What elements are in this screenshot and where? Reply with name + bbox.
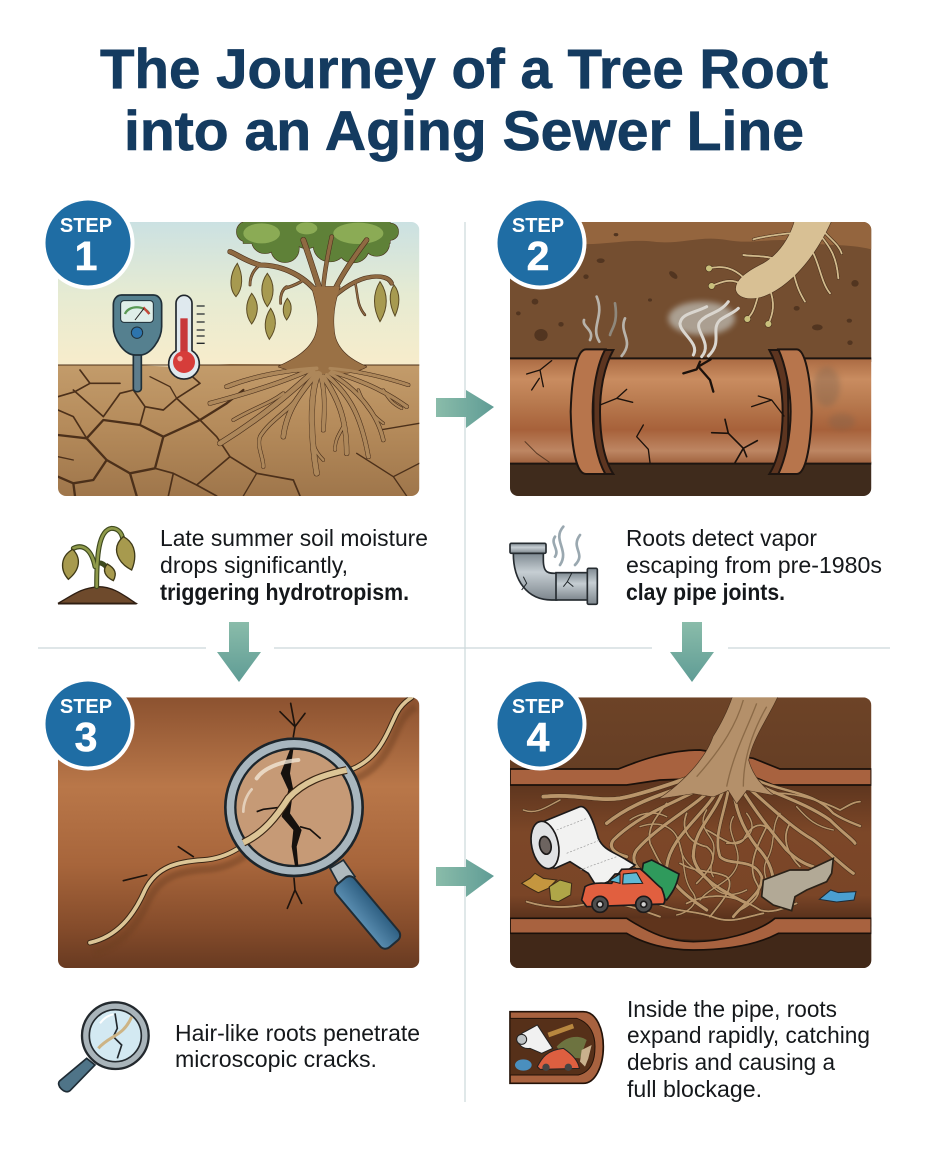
title: The Journey of a Tree Root [100, 37, 828, 100]
panel: step 4 roots blocking pipe [510, 695, 871, 970]
buried soil below pipe [510, 462, 871, 498]
badge: step 1: STEP [60, 215, 112, 237]
blue debris [819, 890, 856, 902]
vapor cloud [668, 302, 738, 357]
text: step 2 caption: escaping from pre-1980s [626, 552, 882, 578]
badge: step 1 [42, 196, 134, 290]
text: step 2 caption [626, 525, 882, 605]
pipe collars [571, 349, 812, 474]
roots [210, 368, 408, 473]
wilted leaves [231, 263, 399, 339]
text: step 1 caption: drops significantly, [160, 552, 348, 578]
icon: soil moisture meter [113, 295, 162, 392]
text: step 3 caption: Hair-like roots penetrate [175, 1020, 420, 1046]
icon: wilting seedling [58, 528, 137, 604]
tree root with filament tips [706, 220, 842, 327]
rock debris [762, 858, 833, 911]
badge: step 4: STEP [512, 696, 564, 718]
magnifying glass [225, 739, 403, 951]
text: step 1 caption: Late summer soil moisture [160, 525, 428, 551]
title [100, 37, 828, 162]
arrow: step 2 down to step 4 [670, 622, 714, 682]
panel: step 2 cracked clay pipe illustration [510, 220, 871, 498]
yellow debris [522, 873, 572, 902]
arrow: step 1 to step 2 [436, 390, 494, 428]
branching roots [523, 770, 860, 920]
badge: step 2 [494, 196, 586, 290]
text: step 1 caption: triggering hydrotropism. [160, 579, 409, 605]
arrow: step 3 to step 4 [436, 859, 494, 897]
text: step 4 caption [627, 996, 870, 1102]
text: step 2 caption: Roots detect vapor [626, 525, 817, 551]
text: step 4 caption: Inside the pipe, roots [627, 996, 837, 1022]
text: step 4 caption: expand rapidly, catching [627, 1022, 870, 1048]
icon: cracked elbow pipe [510, 527, 597, 604]
icon: small magnifier on root [59, 1002, 149, 1092]
pipe body [510, 358, 871, 464]
tree crown [237, 218, 398, 263]
vapor wisps at joint [584, 297, 627, 356]
panel: step 3 root entering crack under magnifier [58, 697, 419, 968]
badge: step 2: STEP [512, 215, 564, 237]
crack outside lens [123, 703, 305, 908]
panel: step 1 dry soil and tree illustration [58, 218, 419, 496]
thin root [90, 697, 416, 952]
text: step 3 caption: microscopic cracks. [175, 1046, 377, 1072]
arrow: step 1 down to step 3 [217, 622, 261, 682]
badge: step 3 [42, 678, 134, 770]
green debris [640, 860, 679, 900]
badge: step 4: 4 [527, 714, 550, 760]
badge: step 1: 1 [75, 233, 97, 279]
pipe interior [510, 770, 871, 927]
badge: step 3: STEP [60, 696, 112, 718]
text: step 1 caption [160, 525, 428, 605]
title: into an Aging Sewer Line [124, 99, 804, 162]
icon: thermometer [169, 295, 205, 379]
tree trunk and branches [210, 237, 408, 473]
badge: step 4 [494, 678, 586, 770]
text: step 2 caption: clay pipe joints. [626, 579, 785, 605]
soil cracks [58, 365, 419, 496]
soil pebbles [516, 233, 859, 345]
crack in lens [281, 749, 302, 866]
badge: step 3: 3 [75, 714, 97, 760]
divider lines [38, 222, 890, 1102]
icon: blocked pipe cross-section [510, 1012, 603, 1083]
pipe cracks [525, 359, 784, 463]
text: step 3 caption [175, 1020, 420, 1072]
badge: step 2: 2 [527, 233, 549, 279]
tree trunk [660, 695, 778, 803]
root in lens [243, 770, 347, 843]
text: step 4 caption: full blockage. [627, 1076, 762, 1102]
toy car [582, 869, 665, 912]
pipe walls [510, 750, 871, 950]
toilet paper roll [527, 807, 635, 887]
text: step 4 caption: debris and causing a [627, 1049, 835, 1075]
